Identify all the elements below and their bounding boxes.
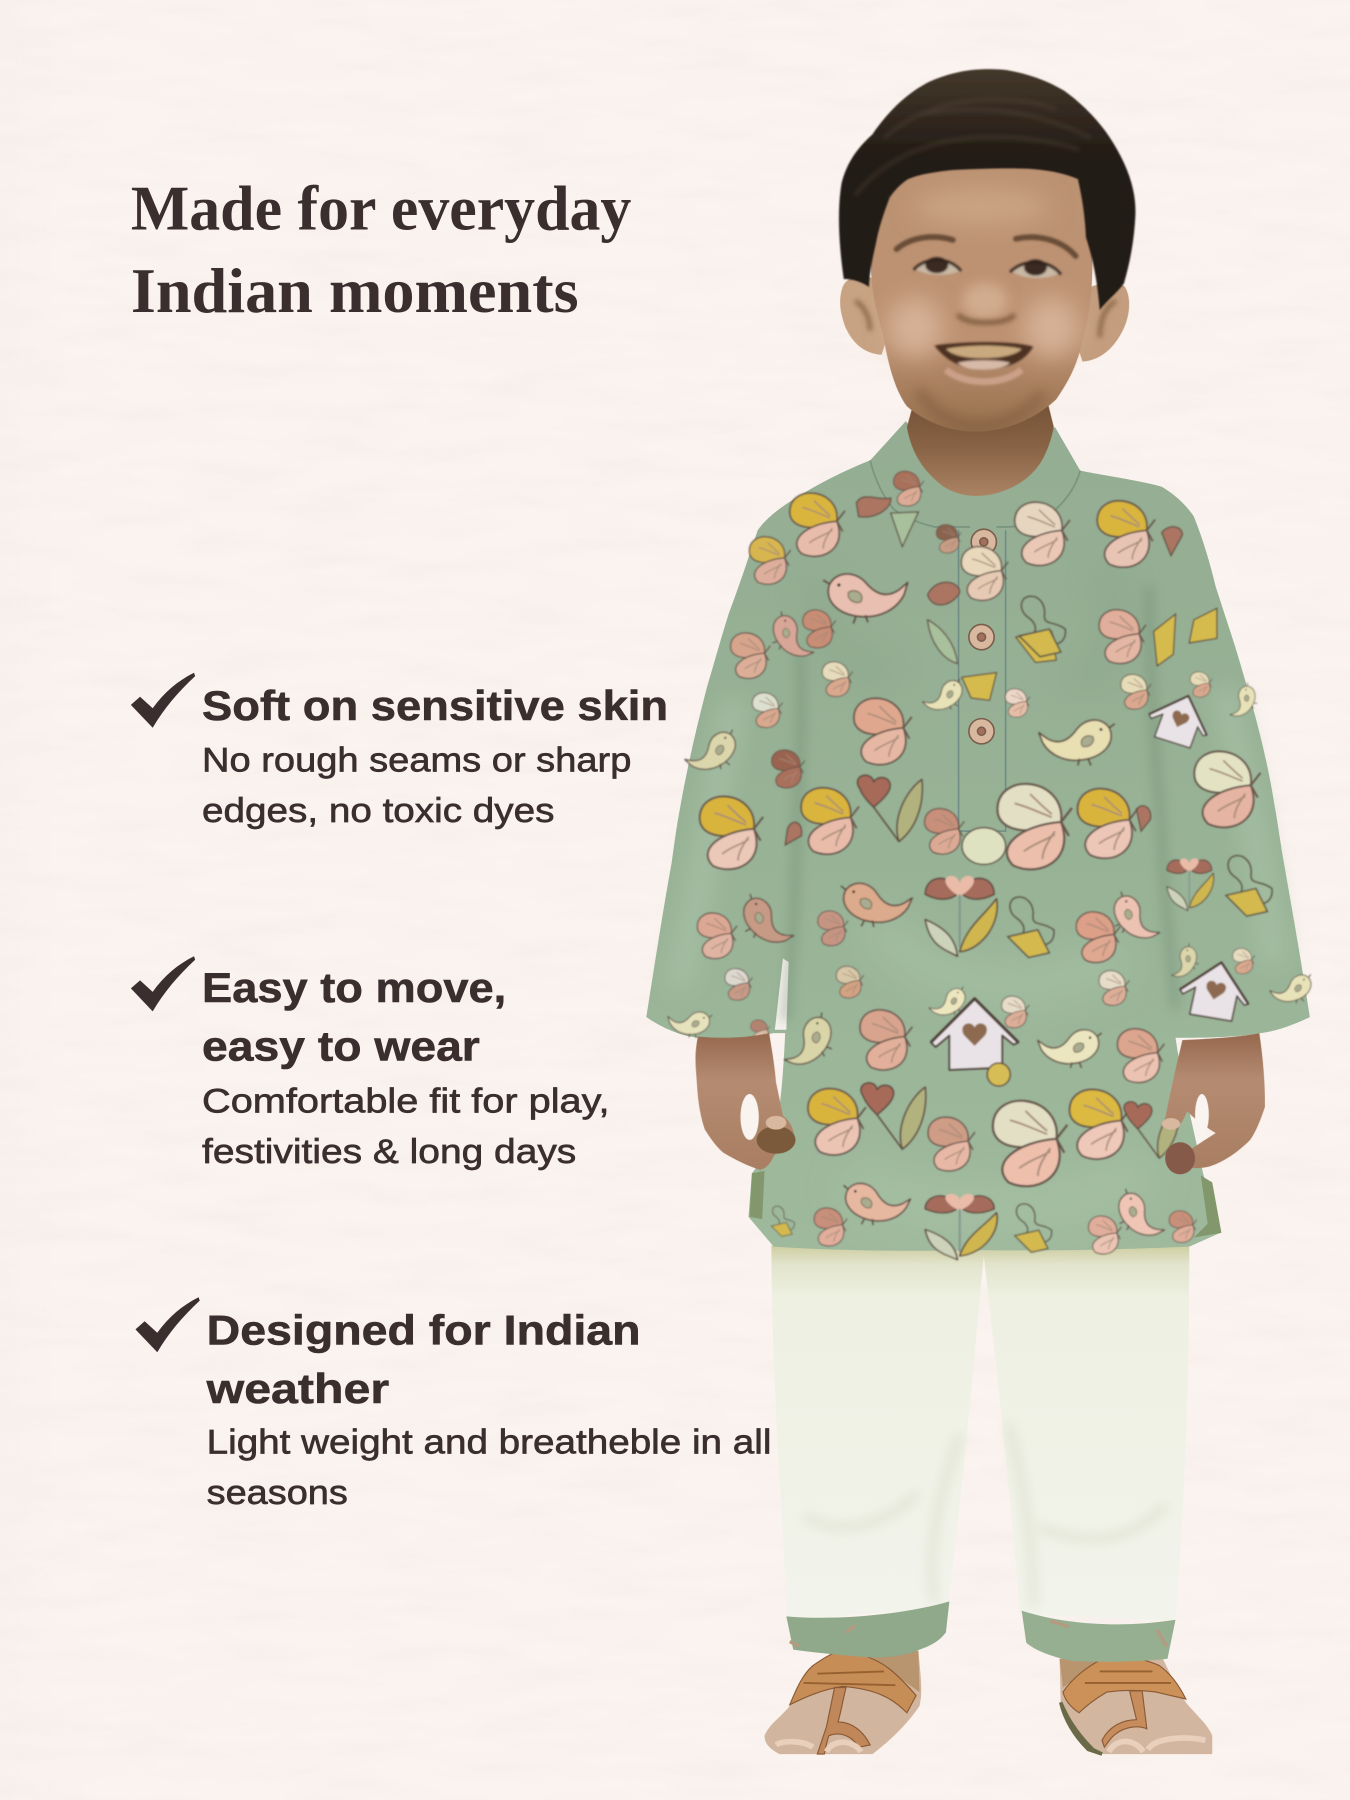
trousers [771, 1246, 1189, 1621]
hands [696, 1033, 1265, 1174]
feature heading: Easy to move, [202, 965, 506, 1011]
kurta shading [677, 562, 1274, 1207]
feature description [202, 1082, 610, 1171]
eyebrows [897, 237, 1076, 256]
ears [840, 276, 1129, 362]
icon: check mark [131, 956, 195, 1011]
photo: smiling boy in green kurta [646, 69, 1319, 1754]
feature description [202, 741, 631, 830]
title: Indian moments [131, 256, 579, 326]
feature description: seasons [207, 1474, 348, 1512]
feature heading [202, 965, 506, 1070]
neck [907, 390, 1054, 496]
kurta collar seam [870, 460, 1080, 527]
title: Made for everyday [131, 174, 631, 244]
kurta side vents [750, 1171, 1221, 1238]
kurta print: birds [668, 574, 1319, 1249]
icon: check mark [135, 1297, 200, 1352]
kurta print: birdhouses and swans [771, 596, 1272, 1252]
feature description: Light weight and breatheble in all [207, 1423, 771, 1461]
hair [839, 69, 1135, 310]
icon: check mark [131, 673, 195, 728]
feature description: edges, no toxic dyes [202, 792, 554, 830]
kurta print: hearts, leaves and flowers [785, 497, 1217, 1260]
feature: easy to move [131, 956, 610, 1171]
kurta placket [959, 530, 1006, 831]
eyes [914, 257, 1061, 278]
buttons [969, 529, 996, 744]
feature heading: Designed for Indian [207, 1307, 641, 1353]
smile [934, 342, 1033, 382]
feature heading: weather [205, 1366, 389, 1412]
sleeve gap [775, 959, 789, 1030]
feature heading [205, 1307, 641, 1412]
kurta [646, 421, 1319, 1260]
feature: soft on sensitive skin [131, 673, 668, 830]
face [871, 166, 1092, 432]
feet and sandals [765, 1650, 1212, 1754]
title [131, 174, 631, 326]
feature description: No rough seams or sharp [202, 741, 631, 779]
feature heading: easy to wear [202, 1024, 480, 1070]
kurta print: butterflies [697, 471, 1260, 1254]
nose [957, 282, 1015, 323]
feature description [207, 1423, 771, 1512]
feature description: festivities & long days [202, 1133, 576, 1171]
feature: designed for Indian weather [135, 1297, 771, 1512]
trouser cuffs [786, 1601, 1176, 1662]
feature heading: Soft on sensitive skin [202, 683, 668, 729]
feature description: Comfortable fit for play, [202, 1082, 610, 1120]
